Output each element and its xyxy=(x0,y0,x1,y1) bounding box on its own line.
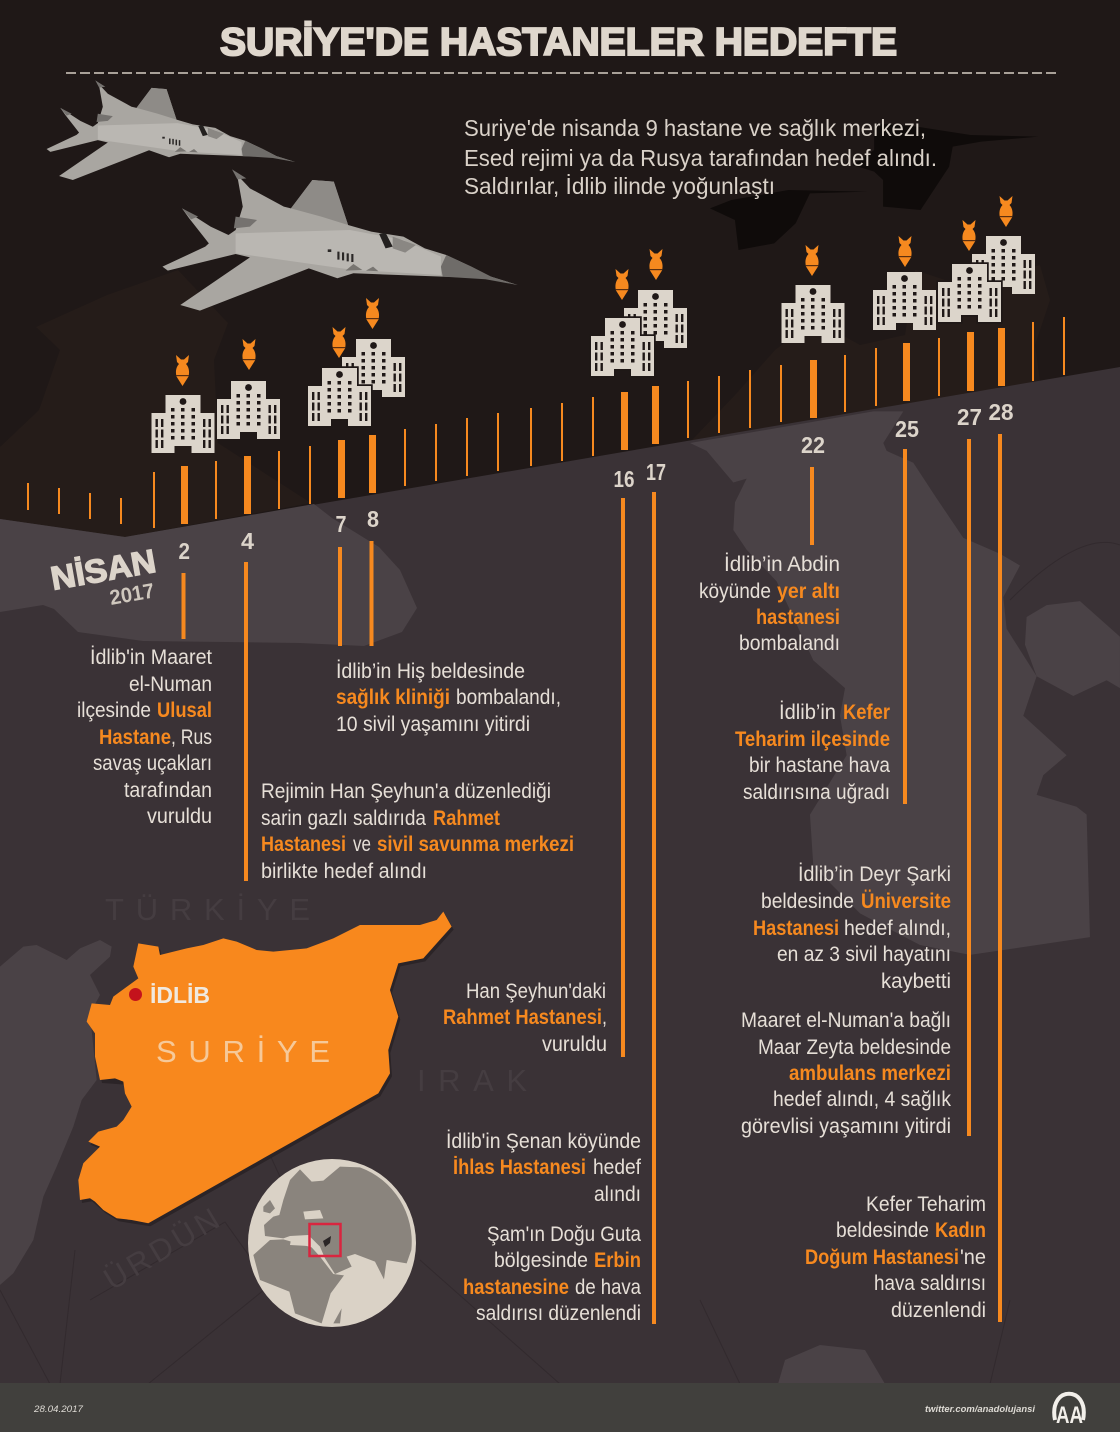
intro text: Suriye'de nisanda 9 hastane ve sağlık merkezi, xyxy=(464,115,926,141)
date numbers: 8 xyxy=(367,506,379,532)
month label: Nisan 2017: 2017 xyxy=(108,579,156,610)
text: April 28: Kefer Teharim xyxy=(866,1193,986,1216)
text: April 16: , xyxy=(602,1006,607,1029)
date numbers: 22 xyxy=(801,432,825,458)
text: April 28: 'ne xyxy=(960,1246,986,1269)
text: April 17: hastanesine xyxy=(463,1276,569,1299)
date numbers: 28 xyxy=(988,399,1014,425)
footer bar: 28.04.2017 xyxy=(33,1404,84,1414)
text: April 27: en az 3 sivil hayatını xyxy=(777,943,951,966)
icon: fighter jet 2 xyxy=(162,169,518,311)
text: April 2: İdlib'in Maaret xyxy=(90,646,212,669)
text: April 2: ilçesinde xyxy=(77,699,151,722)
text: April 22: hastanesi xyxy=(756,606,840,629)
text: April 25: Kefer xyxy=(843,701,890,724)
text: April 25: Teharim ilçesinde xyxy=(735,728,890,751)
date numbers: 17 xyxy=(646,459,666,485)
text: April 17: İhlas Hastanesi xyxy=(453,1156,586,1179)
background: lighter land areas xyxy=(0,411,1120,1384)
background: black fighter silhouettes xyxy=(710,123,1038,250)
text: April 27: hedef alındı, 4 sağlık xyxy=(773,1088,951,1111)
orange leader lines xyxy=(182,434,1002,1324)
map: Syria: SURİYE xyxy=(156,1034,330,1069)
locator globe xyxy=(248,1159,416,1327)
text: April 2: tarafından xyxy=(124,779,212,802)
text: April 27: Maaret el-Numan'a bağlı xyxy=(741,1009,951,1032)
background: border lines xyxy=(0,542,1120,1384)
icon: AA logo xyxy=(1054,1394,1084,1429)
text: April 7: İdlib’in Hiş beldesinde xyxy=(336,660,525,683)
text: April 22: yer altı xyxy=(777,580,840,603)
text: April 2: savaş uçakları xyxy=(93,752,212,775)
text: April 27: Üniversite xyxy=(861,890,951,913)
text: April 17: Şam'ın Doğu Guta xyxy=(487,1223,641,1246)
map: Syria xyxy=(78,912,454,1226)
map labels: neighbouring countries: IRAK xyxy=(417,1063,527,1098)
text: April 22: köyünde xyxy=(699,580,771,603)
text: April 27: kaybetti xyxy=(881,970,951,993)
text: April 22: bombalandı xyxy=(739,632,840,655)
text: April 17: Erbin xyxy=(594,1249,641,1272)
text: April 27: İdlib’in Deyr Şarki xyxy=(798,863,951,886)
text: April 27: Hastanesi xyxy=(753,917,839,940)
map labels: neighbouring countries xyxy=(98,892,527,1297)
text: April 17: alındı xyxy=(594,1183,641,1206)
text: April 4: birlikte hedef alındı xyxy=(261,860,427,883)
text: April 4: ve xyxy=(353,833,371,856)
footer bar xyxy=(0,1383,1120,1432)
text: April 4: Rejimin Han Şeyhun'a düzenlediği xyxy=(261,780,551,803)
text: April 7 xyxy=(336,660,561,736)
text: April 2: el-Numan xyxy=(129,673,212,696)
text: April 4: sivil savunma merkezi xyxy=(377,833,574,856)
text: April 16: vuruldu xyxy=(542,1033,607,1056)
icon: AA logo: AA xyxy=(1056,1402,1083,1429)
text: April 27: ambulans merkezi xyxy=(789,1062,951,1085)
text: April 28: hava saldırısı xyxy=(874,1272,986,1295)
text: April 16 xyxy=(443,980,607,1056)
date numbers: 27 xyxy=(957,404,982,430)
text: April 27: görevlisi yaşamını yitirdi xyxy=(741,1115,951,1138)
text: April 25: bir hastane hava xyxy=(749,754,890,777)
text: April 2 xyxy=(77,646,212,828)
text: April 22 xyxy=(699,553,840,655)
text: April 17 xyxy=(446,1130,641,1325)
text: April 17: İdlib'in Şenan köyünde xyxy=(446,1130,641,1153)
text: April 17: de hava xyxy=(575,1276,641,1299)
text: April 27: Maar Zeyta beldesinde xyxy=(758,1036,951,1059)
text: April 16: Han Şeyhun'daki xyxy=(466,980,606,1003)
text: April 2: vuruldu xyxy=(147,805,212,828)
timeline ticks xyxy=(27,317,1065,528)
text: April 28: Kadın xyxy=(935,1219,986,1242)
text: April 17: bölgesinde xyxy=(494,1249,588,1272)
text: April 17: saldırısı düzenlendi xyxy=(476,1302,641,1325)
text: April 28 xyxy=(805,1193,986,1322)
intro text: Saldırılar, İdlib ilinde yoğunlaştı xyxy=(464,173,775,199)
text: April 4: Rahmet xyxy=(433,807,500,830)
date numbers: 16 xyxy=(614,466,634,492)
text: April 7: 10 sivil yaşamını yitirdi xyxy=(336,713,530,736)
text: April 28: beldesinde xyxy=(836,1219,929,1242)
text: April 17: hedef xyxy=(593,1156,641,1179)
text: April 28: Doğum Hastanesi xyxy=(805,1246,959,1269)
date numbers: 25 xyxy=(895,416,919,442)
text: April 28: düzenlendi xyxy=(891,1299,986,1322)
background: faint land in upper section xyxy=(0,265,1050,537)
date numbers: 7 xyxy=(336,511,346,537)
icon: hospital buildings and bombs xyxy=(152,196,1035,453)
footer bar: twitter.com/anadolujansi xyxy=(925,1404,1036,1414)
icon: fighter jet 1 xyxy=(47,80,295,180)
text: April 2: , Rus xyxy=(171,726,212,749)
date numbers: 4 xyxy=(241,528,254,554)
text: April 16: Rahmet Hastanesi xyxy=(443,1006,602,1029)
intro text: Esed rejimi ya da Rusya tarafından hedef alındı. xyxy=(464,145,937,171)
month label: Nisan 2017: NİSAN xyxy=(48,542,159,597)
timeline event bars xyxy=(181,328,1005,524)
date numbers: 2 xyxy=(178,538,190,564)
text: April 4: Hastanesi xyxy=(261,833,346,856)
text: April 2: Ulusal xyxy=(157,699,212,722)
date numbers xyxy=(178,399,1014,564)
text: April 4 xyxy=(261,780,574,883)
title: SURİYE'DE HASTANELER HEDEFTE xyxy=(220,21,897,64)
text: April 22: İdlib’in Abdin xyxy=(724,553,840,576)
map labels: neighbouring countries: TÜRKİYE xyxy=(105,892,310,927)
map: Syria: İDLİB xyxy=(150,982,210,1008)
text: April 4: sarin gazlı saldırıda xyxy=(261,807,426,830)
map labels: neighbouring countries: ÜRDÜN xyxy=(98,1201,225,1297)
text: April 25: saldırısına uğradı xyxy=(743,781,890,804)
text: April 27: beldesinde xyxy=(761,890,854,913)
background: lower map section xyxy=(0,367,1120,1384)
text: April 7: sağlık kliniği xyxy=(336,686,450,709)
text: April 2: Hastane xyxy=(99,726,171,749)
text: April 25 xyxy=(735,701,890,804)
intro text xyxy=(464,115,937,199)
text: April 27 xyxy=(741,863,951,1138)
text: April 25: İdlib’in xyxy=(779,701,836,724)
text: April 7: bombalandı, xyxy=(456,686,561,709)
text: April 27: hedef alındı, xyxy=(844,917,951,940)
